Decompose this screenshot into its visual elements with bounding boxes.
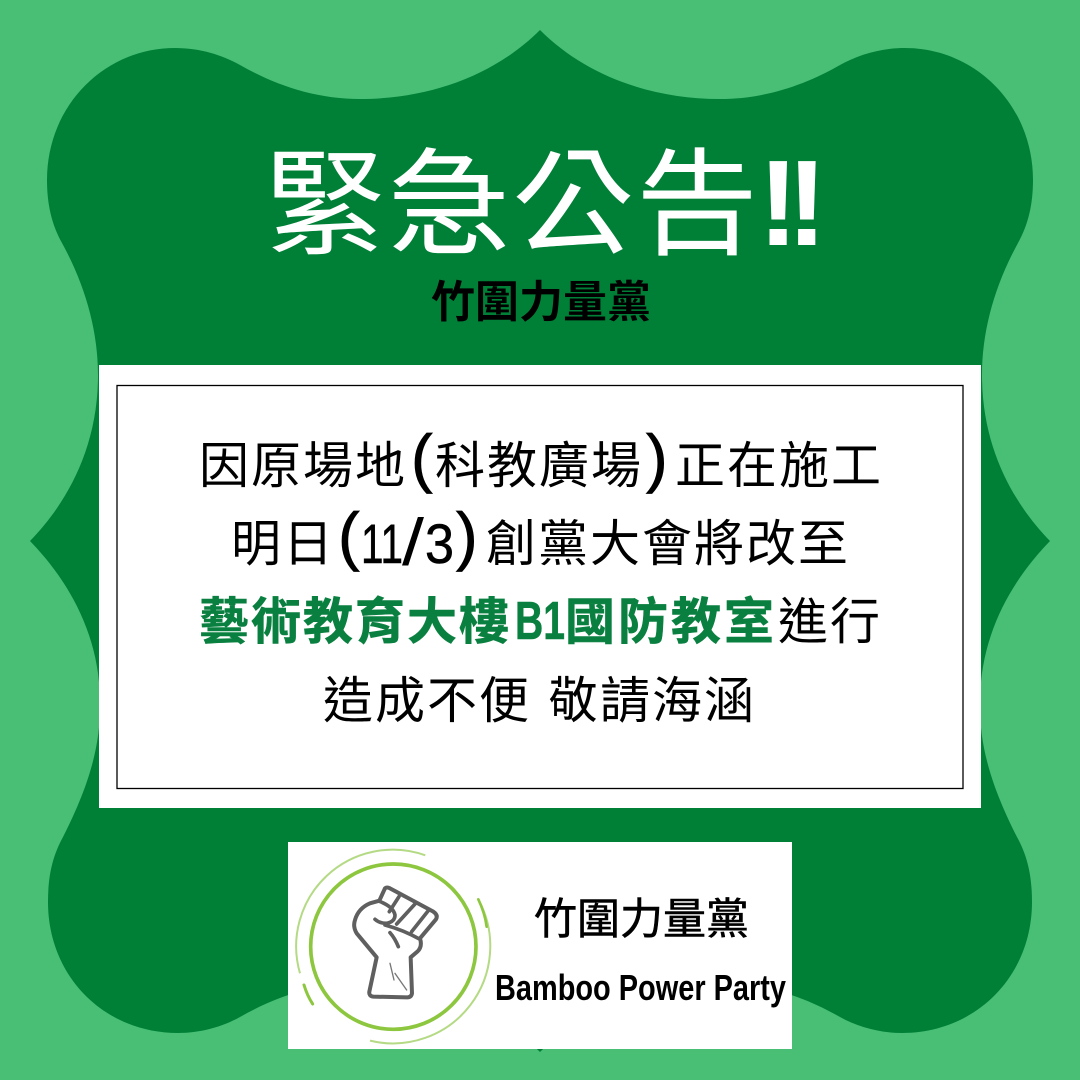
notice line 3: 藝術教育大樓: [199, 594, 511, 650]
notice line 4: 敬請海涵: [548, 673, 756, 729]
notice line 2: 創黨大會將改至: [486, 516, 850, 572]
notice line 2: 3: [425, 512, 454, 575]
notice line 3: [199, 591, 882, 651]
notice line 2: /: [402, 505, 425, 579]
icon: bamboo ring: [296, 850, 490, 1043]
title: 緊急公告: [264, 141, 760, 270]
notice line 4: 造成不便: [323, 673, 531, 729]
notice line 1: 正在施工: [675, 438, 883, 494]
notice line 1: (: [411, 421, 433, 494]
logo chinese name: 竹圍力量黨: [534, 896, 749, 944]
notice line 1: [199, 421, 883, 494]
notice line 2: 明日: [231, 516, 335, 572]
notice line 4: [323, 673, 756, 729]
logo panel: [288, 842, 792, 1049]
notice line 2: 11: [361, 512, 403, 575]
notice line 3: 國防教室: [565, 594, 777, 650]
notice line 1: ): [646, 421, 668, 494]
notice line 1: 因原場地: [199, 438, 407, 494]
icon: fist: [354, 887, 437, 997]
logo english name: Bamboo Power Party: [495, 967, 786, 1008]
notice line 2: ): [456, 499, 478, 572]
notice line 3: B1: [515, 591, 565, 651]
panel: notice: [99, 365, 981, 808]
notice line 3: 進行: [778, 594, 882, 650]
notice line 2: (: [338, 499, 360, 572]
subtitle: 竹圍力量黨: [431, 278, 651, 327]
notice line 1: 科教廣場: [435, 438, 643, 494]
title: !!: [758, 135, 817, 271]
notice line 2: [231, 499, 850, 579]
